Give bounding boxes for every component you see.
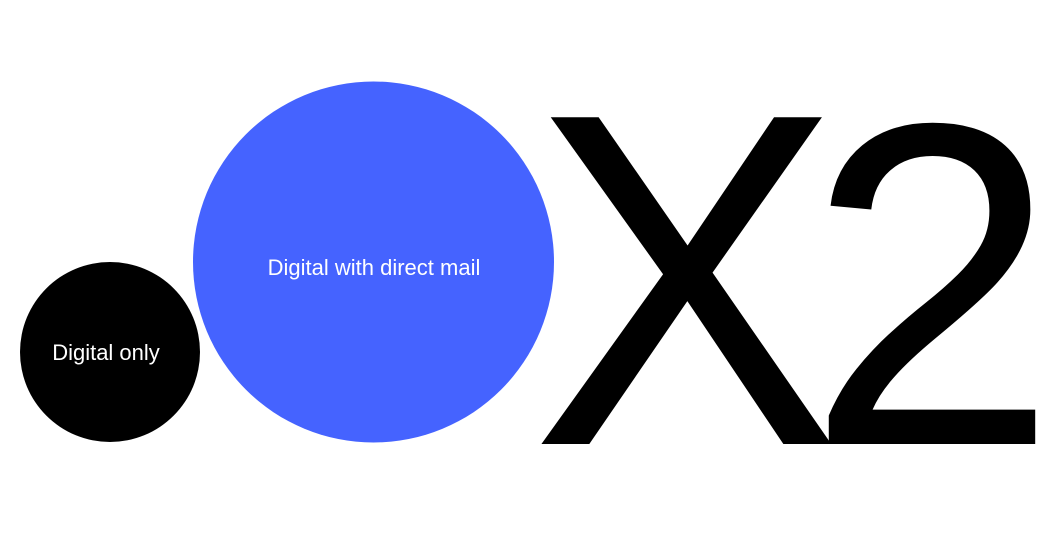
heading: X2 multiplier: X [531,14,841,545]
circle: digital only [20,262,200,442]
label: digital only: Digital only [52,340,160,365]
label: digital with direct mail: Digital with direct mail [268,255,480,280]
circle: digital with direct mail [193,82,554,442]
heading: X2 multiplier [531,14,1050,545]
